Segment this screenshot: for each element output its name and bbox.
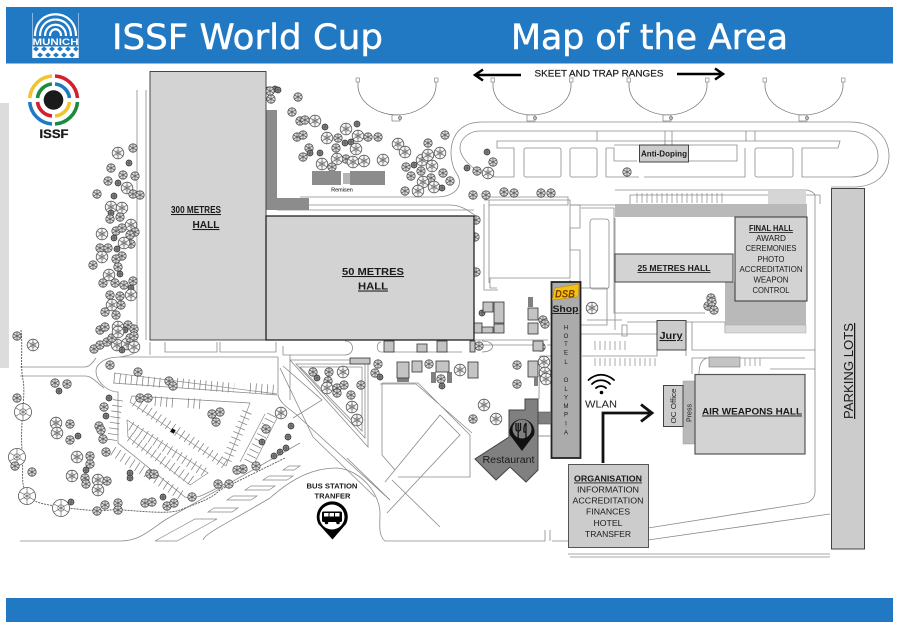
triangle island — [290, 360, 368, 447]
final hall box: WEAPON — [754, 276, 789, 284]
Remisen: Remisen — [331, 188, 353, 194]
hotel name letters: L — [564, 387, 568, 393]
hotel name letters: O — [564, 334, 569, 340]
grey outbuildings — [266, 110, 806, 386]
trees in car park area — [27, 339, 39, 351]
title: ISSF World Cup: ISSF World Cup — [112, 18, 383, 58]
hotel name letters: I — [565, 422, 567, 428]
boundary hedge — [21, 330, 285, 512]
final hall box: PHOTO — [758, 255, 784, 264]
300 metres hall: HALL — [192, 219, 220, 231]
oc office — [664, 386, 683, 426]
wlan — [585, 375, 617, 410]
300 metres hall — [150, 72, 266, 340]
organisation box: ACCREDITATION — [572, 496, 644, 506]
trees above 50m hall — [265, 87, 271, 93]
icon: wifi — [588, 375, 614, 393]
50 metres hall: HALL — [358, 280, 389, 292]
icon: Munich logo: MUNICH — [32, 37, 79, 48]
car parking rows — [112, 373, 277, 497]
road network — [20, 90, 889, 557]
shop label: Shop — [552, 304, 579, 315]
hotel name letters: H — [564, 326, 568, 332]
anti-doping box — [640, 145, 688, 162]
restaurant — [475, 399, 551, 482]
icon: DSB logo: DSB — [555, 288, 575, 300]
hotel name letters: Y — [564, 396, 568, 402]
jury box: Jury — [660, 330, 683, 342]
bus station: BUS STATION — [306, 482, 358, 490]
air weapons hall — [664, 374, 805, 454]
bus station — [306, 482, 358, 540]
press annex — [683, 381, 695, 444]
trees in triangle — [309, 368, 317, 376]
hotel olympia and shop — [552, 282, 580, 458]
final hall box: FINAL HALL — [749, 224, 793, 233]
trees among central buildings — [538, 356, 550, 368]
hotel name letters: P — [564, 412, 568, 418]
hotel name letters — [564, 326, 569, 436]
organisation box — [568, 464, 648, 548]
title: Map of the Area: Map of the Area — [511, 18, 788, 58]
air weapons hall: AIR WEAPONS HALL — [702, 406, 802, 418]
parking lots: PARKING LOTS — [842, 323, 856, 419]
footer banner — [6, 598, 893, 622]
25 metres hall: 25 METRES HALL — [638, 263, 710, 273]
bus station: TRANFER — [314, 492, 351, 500]
hotel name letters: M — [564, 404, 568, 410]
hotel name letters: L — [564, 360, 568, 366]
parking lots — [832, 188, 864, 549]
25 metres hall — [615, 254, 733, 282]
header banner — [6, 7, 893, 64]
final hall box: ACCREDITATION — [740, 265, 803, 274]
final hall box: CEREMONIES — [746, 244, 796, 253]
icon: ISSF logo: ISSF — [40, 129, 68, 141]
trees — [8, 86, 718, 516]
left grey edge bar — [0, 103, 9, 368]
Remisen — [312, 171, 385, 194]
arrow: right — [677, 68, 723, 80]
press annex: Press — [686, 404, 694, 422]
skeet and trap ranges — [356, 68, 845, 121]
hotel name letters: T — [564, 342, 568, 348]
organisation box: TRANSFER — [585, 529, 631, 539]
final hall wings — [615, 204, 807, 333]
50 metres hall: 50 METRES — [342, 266, 404, 278]
oc office: OC Office — [669, 388, 678, 424]
arrow: organisation to air weapons — [603, 404, 652, 463]
left woodland — [129, 144, 137, 152]
icon: bus pin — [317, 501, 348, 540]
300 metres hall: 300 METRES — [171, 204, 221, 216]
hotel name letters: O — [564, 378, 569, 384]
icon: DSB logo — [552, 284, 579, 300]
organisation box: INFORMATION — [577, 484, 639, 494]
arrow: left — [475, 70, 521, 80]
final hall box: CONTROL — [752, 286, 790, 295]
icon: restaurant pin — [510, 419, 534, 451]
organisation box: FINANCES — [586, 506, 630, 516]
organisation box: ORGANISATION — [574, 474, 642, 484]
hotel name letters: A — [564, 430, 568, 436]
bus bays — [155, 466, 300, 541]
organisation box: HOTEL — [594, 518, 623, 528]
trees in road loops — [484, 149, 490, 155]
50 metres hall — [266, 216, 474, 340]
icon: ISSF logo — [30, 76, 78, 141]
icon: Munich logo — [32, 13, 79, 58]
anti-doping box: Anti-Doping — [641, 150, 687, 158]
final hall box: AWARD — [756, 234, 786, 243]
hotel name letters: E — [564, 350, 568, 356]
wlan: WLAN — [585, 398, 617, 410]
jury box — [657, 320, 686, 350]
restaurant: Restaurant — [482, 455, 535, 466]
final hall box — [735, 217, 807, 301]
skeet and trap label: SKEET AND TRAP RANGES — [534, 68, 664, 78]
